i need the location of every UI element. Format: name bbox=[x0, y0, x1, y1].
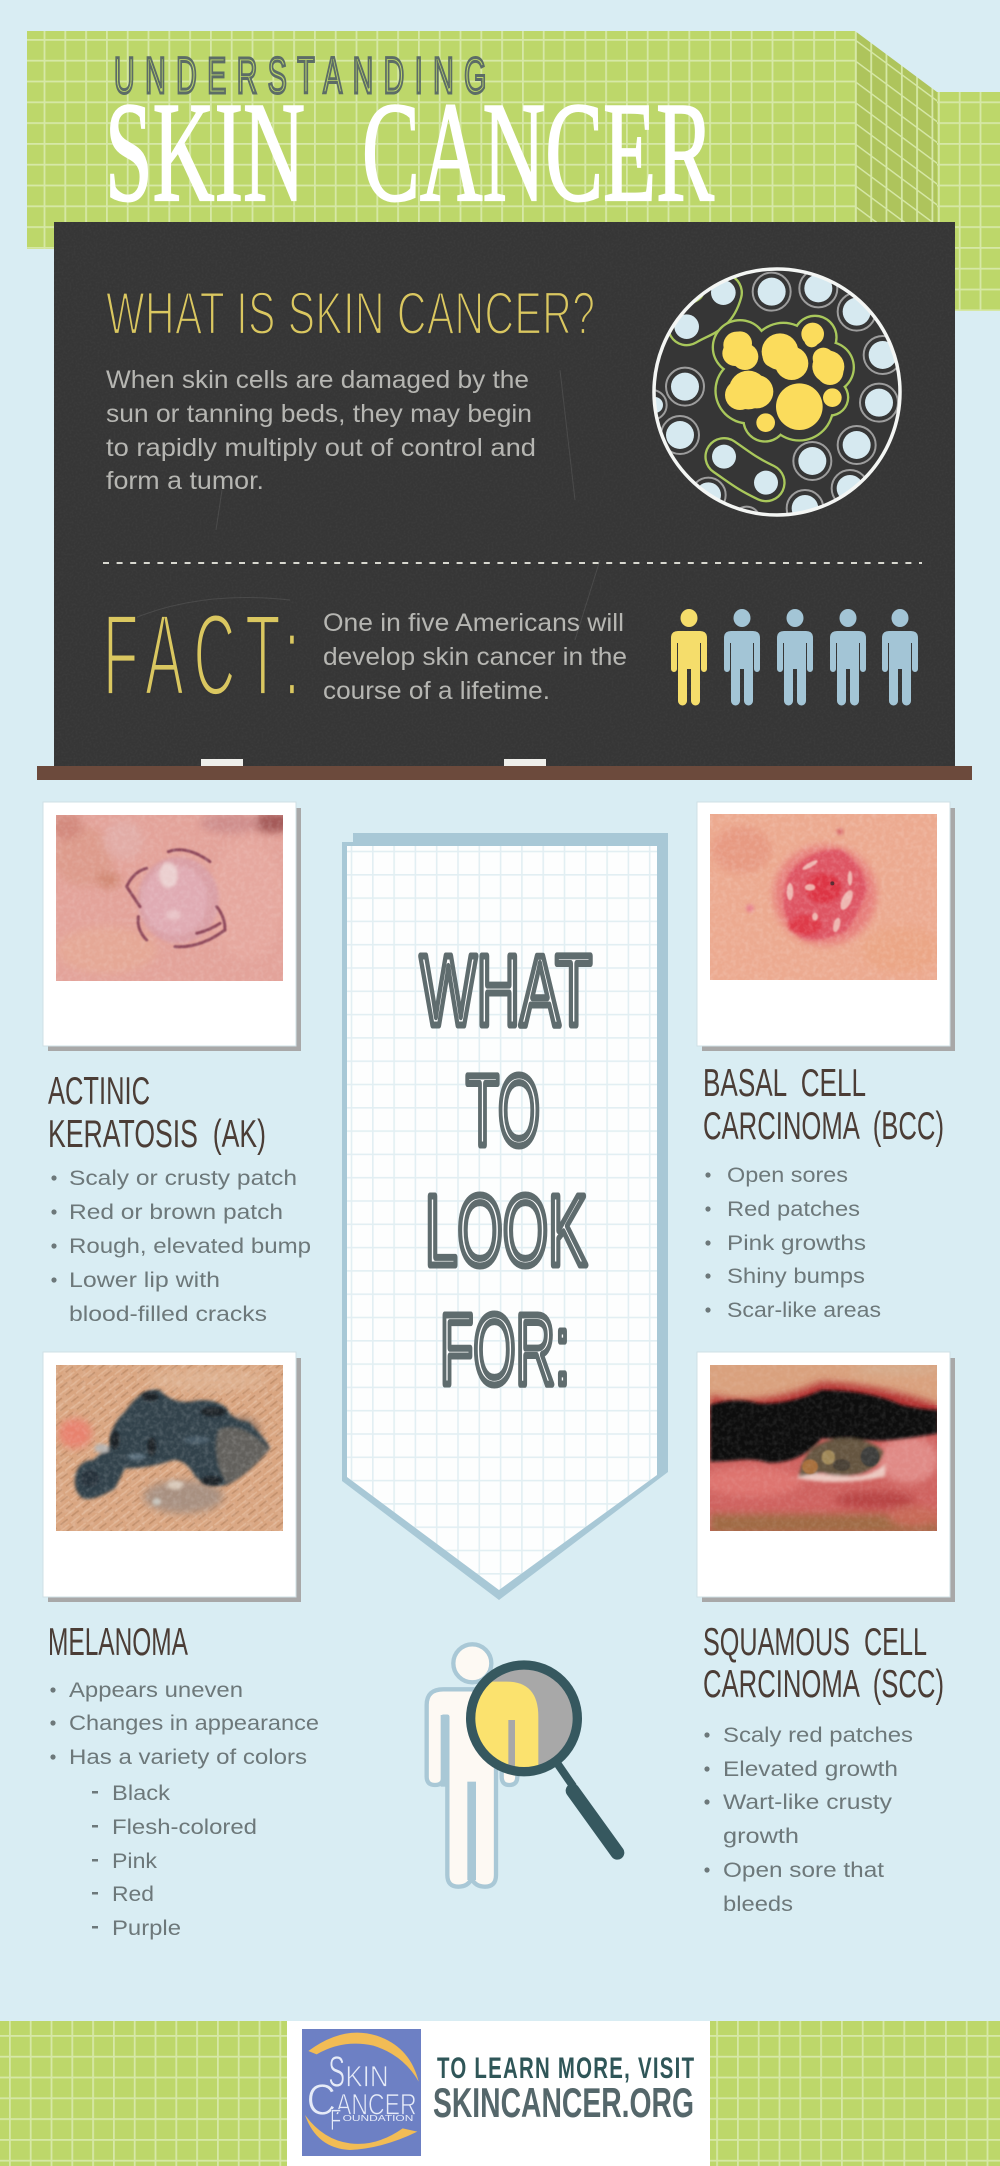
person: yellow bbox=[671, 609, 707, 706]
heading: what to look for: WHAT bbox=[420, 935, 592, 1047]
heading: squamous cell carcinoma bbox=[703, 1621, 944, 1706]
list: actinic keratosis signs: Red or brown patch bbox=[69, 1201, 283, 1224]
chalk pieces bbox=[201, 759, 546, 767]
list: basal cell carcinoma signs: Red patches bbox=[727, 1198, 860, 1221]
list: melanoma signs: Appears uneven bbox=[69, 1679, 243, 1702]
list: melanoma signs: Purple bbox=[112, 1917, 181, 1940]
list: actinic keratosis signs: Scaly or crusty patch bbox=[69, 1167, 297, 1190]
list: actinic keratosis signs bbox=[51, 1167, 311, 1326]
list: squamous cell carcinoma signs: Elevated growth bbox=[723, 1758, 898, 1781]
polaroid: squamous cell carcinoma photo bbox=[697, 1352, 955, 1602]
list: melanoma signs: Changes in appearance bbox=[69, 1712, 319, 1735]
polaroid: actinic keratosis photo bbox=[43, 802, 301, 1051]
text block: definition bbox=[106, 366, 536, 495]
person: blue 2 bbox=[777, 609, 813, 706]
person: blue 4 bbox=[882, 609, 918, 706]
heading: what to look for: TO bbox=[466, 1055, 540, 1167]
logo wordmark: ANCER bbox=[336, 2088, 417, 2121]
section: squamous cell carcinoma bbox=[703, 1621, 944, 1916]
magnifying glass bbox=[467, 1665, 617, 1853]
list: basal cell carcinoma signs bbox=[705, 1164, 881, 1322]
panel: chalkboard bbox=[54, 222, 955, 767]
logo arcs bbox=[305, 2033, 419, 2150]
footer green band bbox=[0, 2021, 1000, 2166]
list: melanoma signs: Black bbox=[112, 1782, 171, 1805]
connected cells: upper left bbox=[674, 280, 736, 339]
heading: basal cell carcinoma bbox=[703, 1062, 944, 1148]
icon: one in five people bbox=[671, 609, 918, 706]
list: basal cell carcinoma signs: Pink growths bbox=[727, 1232, 866, 1255]
text block: fact statement: course of a lifetime. bbox=[323, 677, 550, 705]
heading: actinic keratosis: ACTINIC bbox=[48, 1070, 150, 1113]
list: squamous cell carcinoma signs: Wart-like crusty bbox=[723, 1791, 893, 1814]
section: actinic keratosis bbox=[48, 1070, 311, 1326]
panel: what to look for pennant bbox=[342, 833, 668, 1600]
tumor outline bbox=[712, 315, 855, 443]
green grid banner bbox=[27, 31, 1000, 311]
text block: definition: to rapidly multiply out of control and bbox=[106, 434, 536, 462]
list: melanoma signs: Has a variety of colors bbox=[69, 1746, 307, 1769]
heading: actinic keratosis: KERATOSIS (AK) bbox=[48, 1113, 266, 1156]
list: squamous cell carcinoma signs: growth bbox=[723, 1825, 799, 1848]
text block: fact statement bbox=[323, 609, 627, 705]
heading: melanoma: MELANOMA bbox=[48, 1621, 188, 1664]
footer white panel bbox=[287, 2021, 710, 2166]
heading: fact: FACT: bbox=[103, 591, 300, 720]
text block: fact statement: One in five Americans will bbox=[323, 609, 624, 637]
list: squamous cell carcinoma signs: Scaly red patches bbox=[723, 1724, 913, 1747]
section: melanoma bbox=[48, 1621, 319, 1940]
logo: foundation line: OUNDATION bbox=[343, 2113, 413, 2123]
heading: what to look for: LOOK bbox=[425, 1175, 587, 1287]
heading: what to look for bbox=[420, 935, 592, 1406]
icon: skin cell circle with tumor bbox=[652, 267, 902, 517]
polaroid: basal cell carcinoma photo bbox=[697, 802, 955, 1051]
logo: skin cancer foundation bbox=[302, 2029, 421, 2156]
text block: definition: form a tumor. bbox=[106, 467, 264, 495]
text block: fact statement: develop skin cancer in the bbox=[323, 643, 627, 671]
list: actinic keratosis signs: Lower lip with bbox=[69, 1269, 220, 1292]
tumor blobs bbox=[722, 323, 844, 432]
text block: definition: When skin cells are damaged by the bbox=[106, 366, 529, 394]
heading: what is skin cancer: WHAT IS SKIN CANCER? bbox=[106, 280, 595, 347]
list: basal cell carcinoma signs: Scar-like areas bbox=[727, 1299, 881, 1322]
logo wordmark: S bbox=[328, 2048, 345, 2096]
logo wordmark: F bbox=[330, 2104, 341, 2137]
heading: what to look for: FOR: bbox=[440, 1294, 570, 1406]
call to action bbox=[433, 2052, 694, 2126]
list: squamous cell carcinoma signs: bleeds bbox=[723, 1893, 793, 1916]
list: basal cell carcinoma signs: Open sores bbox=[727, 1164, 848, 1187]
title line: skin cancer: CANCER bbox=[362, 73, 714, 231]
title line: understanding: UNDERSTANDING bbox=[114, 47, 486, 104]
polaroid: melanoma photo bbox=[43, 1352, 301, 1602]
divider: dashed line bbox=[103, 562, 922, 564]
title bbox=[105, 47, 714, 231]
chalkboard ledge bbox=[37, 766, 972, 780]
call to action: TO LEARN MORE, VISIT bbox=[437, 2052, 694, 2085]
text block: definition: sun or tanning beds, they may begin bbox=[106, 400, 532, 428]
list: melanoma signs: Flesh-colored bbox=[112, 1816, 257, 1839]
list: melanoma signs: Pink bbox=[112, 1850, 158, 1873]
list: melanoma signs: Red bbox=[112, 1883, 154, 1906]
person: blue 1 bbox=[724, 609, 760, 706]
list: squamous cell carcinoma signs: Open sore that bbox=[723, 1859, 884, 1882]
person bbox=[427, 1644, 517, 1887]
icon: person and magnifying glass bbox=[427, 1644, 617, 1887]
title line: skin cancer: SKIN bbox=[105, 73, 305, 231]
list: squamous cell carcinoma signs bbox=[704, 1724, 913, 1916]
list: melanoma signs bbox=[50, 1679, 319, 1940]
heading: actinic keratosis bbox=[48, 1070, 266, 1156]
list: actinic keratosis signs: Rough, elevated bump bbox=[69, 1235, 311, 1258]
logo wordmark: C bbox=[307, 2076, 336, 2124]
section: basal cell carcinoma bbox=[703, 1062, 944, 1322]
heading: basal cell carcinoma: BASAL CELL bbox=[703, 1062, 866, 1105]
list: basal cell carcinoma signs: Shiny bumps bbox=[727, 1265, 865, 1288]
logo wordmark: KIN bbox=[345, 2060, 389, 2093]
logo wordmark bbox=[307, 2048, 417, 2137]
connected cells: lower bbox=[712, 445, 778, 495]
title line: skin cancer bbox=[105, 73, 714, 231]
person: blue 3 bbox=[830, 609, 866, 706]
list: actinic keratosis signs: blood-filled cracks bbox=[69, 1303, 267, 1326]
call to action: SKINCANCER.ORG bbox=[433, 2079, 694, 2126]
